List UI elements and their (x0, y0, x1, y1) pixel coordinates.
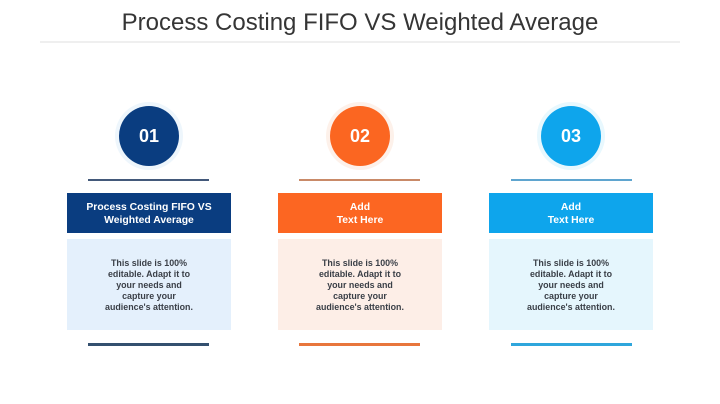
text block: column 02 (278, 239, 442, 330)
icon: number badge 02: 02 (350, 126, 370, 146)
text block: column 01: editable. Adapt it to (108, 269, 190, 279)
text block: column 01: your needs and (116, 280, 182, 290)
heading: column 03 (489, 193, 653, 233)
icon: number badge 01 (115, 102, 183, 170)
text block: column 03: This slide is 100% (533, 258, 609, 268)
text block: column 03 (489, 239, 653, 330)
text block: column 02: your needs and (327, 280, 393, 290)
icon: number badge 03 (537, 102, 605, 170)
text block: column 02: editable. Adapt it to (319, 269, 401, 279)
heading: column 03: Add (561, 202, 581, 213)
text block: column 01 (67, 239, 231, 330)
heading: column 01 (67, 193, 231, 233)
panel: column 01 (67, 102, 231, 346)
heading: column 02: Add (350, 202, 370, 213)
text block: column 03: your needs and (538, 280, 604, 290)
text block: column 01: This slide is 100% (111, 258, 187, 268)
text block: column 03: capture your (544, 291, 598, 301)
text block: column 02: audience's attention. (316, 302, 404, 312)
icon: number badge 01: 01 (139, 126, 159, 146)
title: Process Costing FIFO VS Weighted Average (122, 9, 598, 36)
text block: column 03: editable. Adapt it to (530, 269, 612, 279)
text block: column 01: capture your (122, 291, 176, 301)
icon: number badge 02 (326, 102, 394, 170)
text block: column 02: This slide is 100% (322, 258, 398, 268)
text block: column 03: audience's attention. (527, 302, 615, 312)
heading: column 03: Text Here (548, 215, 594, 226)
heading: column 02: Text Here (337, 215, 383, 226)
heading: column 01: Weighted Average (104, 215, 194, 226)
icon: number badge 03: 03 (561, 126, 581, 146)
heading: column 02 (278, 193, 442, 233)
panel: column 03 (489, 102, 653, 346)
panel: column 02 (278, 102, 442, 346)
heading: column 01: Process Costing FIFO VS (86, 202, 212, 213)
text block: column 01: audience's attention. (105, 302, 193, 312)
text block: column 02: capture your (333, 291, 387, 301)
